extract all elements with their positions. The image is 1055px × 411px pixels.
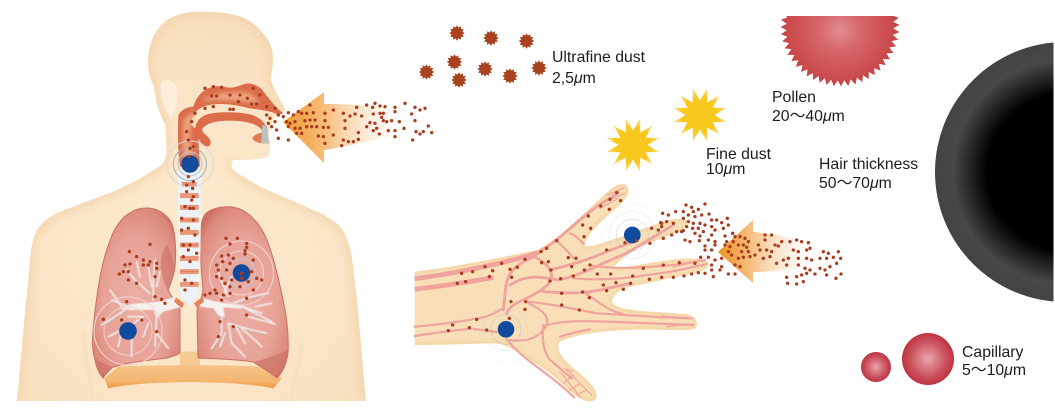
bronchi branches (102, 260, 275, 358)
particles in right lung (205, 238, 262, 337)
blue deposit markers on hand (498, 227, 641, 338)
label: capillary: 5～10μm (962, 362, 1026, 379)
pulse rings: wrist (473, 296, 539, 363)
pulse rings: throat (167, 141, 213, 187)
hand silhouette (415, 184, 708, 401)
hand with blood vessels (415, 184, 708, 401)
particles in trachea (182, 177, 197, 290)
lung shading (96, 245, 288, 378)
human torso with respiratory system (17, 12, 366, 401)
particles in airway and lungs (103, 87, 432, 337)
label: hair thickness: Hair thickness (819, 156, 918, 173)
label: fine dust: Fine dust (706, 146, 771, 163)
thick veins of the wrist (415, 253, 538, 289)
particles in nasal cavity (187, 87, 275, 157)
label: ultrafine dust: Ultrafine dust (552, 49, 645, 66)
particle cloud at fingertips (661, 204, 841, 284)
pollen grain (780, 16, 900, 86)
soft edge shading of the hand (415, 184, 708, 401)
diaphragm (104, 352, 282, 388)
capillary circles (861, 333, 954, 385)
left lung (92, 208, 180, 378)
right lung (197, 207, 288, 378)
particles in left lung (103, 244, 165, 332)
ear (160, 80, 178, 120)
particles inside hand vessels (448, 193, 701, 331)
particle stream at nose (267, 103, 432, 146)
nasal cavity and airway (178, 83, 283, 167)
body silhouette (17, 12, 366, 401)
label: capillary: Capillary (962, 344, 1023, 361)
pulse rings: finger (602, 204, 663, 266)
particles around hand (448, 193, 841, 331)
arrow: particles reaching hand (718, 220, 815, 283)
label: hair thickness: 50～70μm (819, 175, 892, 192)
hair cross-section (935, 42, 1055, 302)
trachea (174, 170, 204, 308)
label: pollen: 20～40μm (772, 108, 845, 125)
label: fine dust: 10μm (706, 161, 745, 178)
label: pollen: Pollen (772, 89, 816, 106)
label: ultrafine dust: 2,5μm (552, 70, 596, 87)
arm shading lines (83, 330, 302, 401)
pulse rings: lungs (94, 241, 274, 365)
soft edge shading of the body (17, 12, 366, 401)
vessels through palm and fingers (503, 193, 673, 313)
blue deposit markers (119, 155, 250, 340)
ultrafine dust spores (419, 25, 547, 88)
fine dust particles (605, 87, 728, 173)
arrow: air entering nose (283, 92, 405, 163)
